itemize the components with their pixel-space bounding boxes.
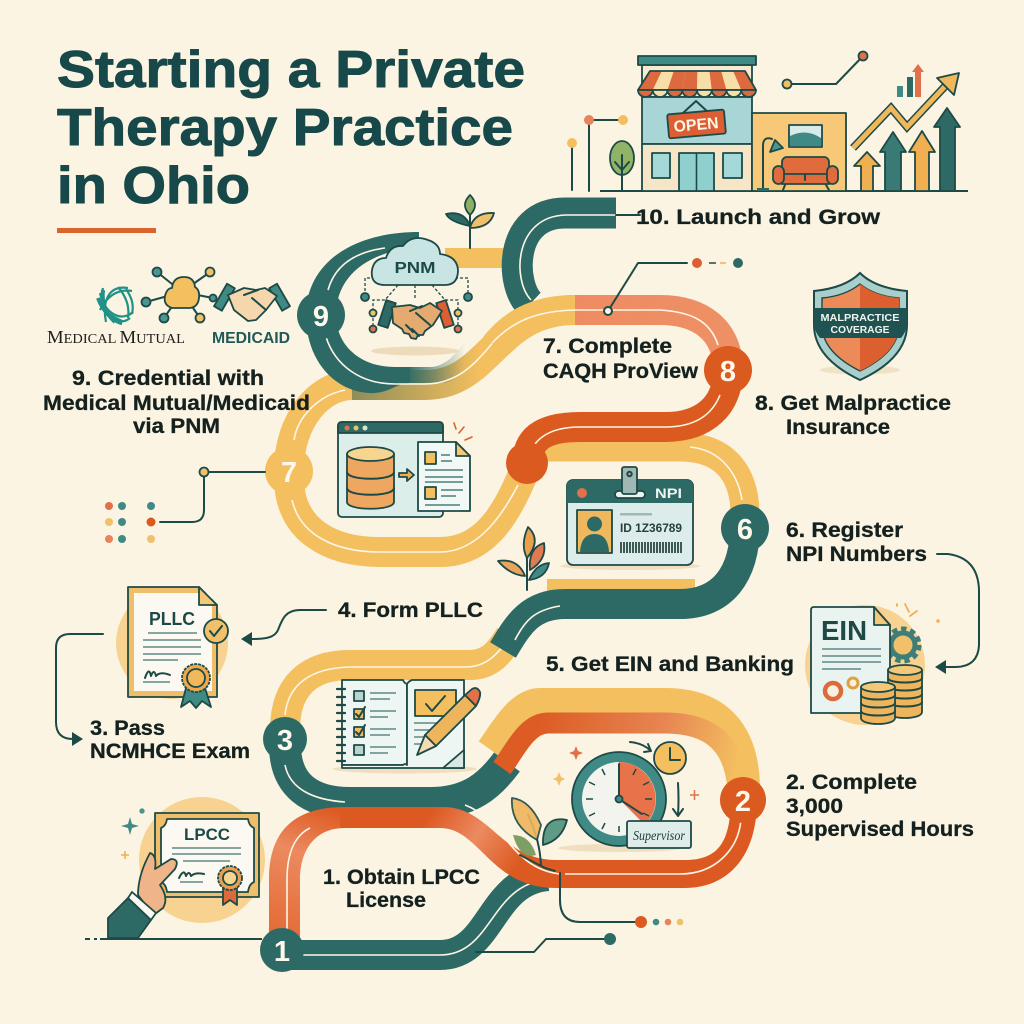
label: 4: 4. Form PLLC	[338, 599, 483, 622]
connector: CAQH leader	[604, 258, 743, 315]
road: segment 5-6 teal	[503, 525, 745, 650]
label: 2: 3,000	[786, 795, 843, 818]
label: 9	[43, 367, 310, 438]
label: 3: 3. Pass	[90, 717, 165, 740]
PLLC text: PLLC	[149, 609, 195, 629]
clock case	[572, 752, 666, 846]
label: 7 complete: CAQH ProView	[543, 360, 699, 383]
label: 7 complete: 7. Complete	[543, 335, 672, 358]
road: segment 3-4 yellow	[285, 636, 510, 730]
label: 10: 10. Launch and Grow	[636, 206, 881, 229]
sparkles	[569, 746, 583, 760]
sparkle	[121, 817, 139, 835]
road: segment 2-3 yellow and orange	[491, 703, 745, 790]
ground line	[600, 190, 968, 192]
icon: PLLC document	[116, 587, 228, 708]
open book	[342, 680, 407, 765]
icon: LPCC certificate	[108, 797, 265, 938]
label: 2	[786, 771, 974, 841]
road: segment 7 yellow lower	[289, 465, 527, 552]
road: segment 10 teal	[517, 213, 616, 304]
step marker 3	[263, 717, 307, 761]
ground shadow	[820, 366, 900, 374]
OPEN sign	[667, 101, 726, 138]
shield text: MALPRACTICE	[820, 312, 900, 324]
gear large	[888, 630, 918, 660]
connector: step 7 leader with dots	[105, 468, 265, 543]
label: 2: Supervised Hours	[786, 818, 974, 841]
sleeve	[108, 898, 151, 938]
dot	[139, 808, 145, 814]
backing circle	[116, 587, 228, 699]
signature	[145, 671, 170, 678]
label: 9: Medical Mutual/Medicaid	[43, 392, 310, 415]
signature	[179, 872, 204, 878]
title	[57, 41, 525, 215]
right lines	[414, 723, 440, 744]
seal	[181, 664, 211, 708]
label: 5: 5. Get EIN and Banking	[546, 653, 794, 676]
NPI text: NPI	[655, 485, 682, 501]
road: segment 1 teal	[282, 876, 548, 955]
card header	[567, 480, 693, 503]
label: 9: 9. Credential with	[72, 367, 264, 390]
label: 1: License	[346, 889, 426, 912]
document	[418, 442, 470, 511]
icon: medical mutual logo	[47, 287, 185, 347]
step marker 7	[265, 447, 313, 495]
hand	[138, 853, 177, 914]
arrow: PLLC to step 3	[56, 634, 103, 746]
title: in Ohio	[57, 157, 250, 215]
floating connector	[782, 52, 868, 88]
backing circle	[139, 797, 265, 923]
text lines	[822, 649, 881, 669]
connector: plant to dots	[560, 873, 683, 928]
transfer arrow	[399, 469, 414, 481]
clock face	[582, 762, 656, 836]
step marker 9	[297, 291, 345, 339]
shield outer	[814, 273, 907, 380]
road: segment 3 teal	[285, 745, 507, 803]
blob on orange segment	[506, 442, 548, 484]
road: segment 9 yellow connector	[445, 248, 505, 268]
icon: checklist notebook	[333, 680, 480, 774]
shop building	[638, 56, 756, 191]
icon: malpractice shield	[814, 273, 907, 380]
mini bar chart	[897, 64, 924, 97]
small clock	[654, 742, 686, 774]
sparkle small	[121, 851, 129, 859]
browser window	[338, 422, 443, 517]
road: segment 5-6 yellow inner strip	[547, 579, 695, 593]
label: 3: NCMHCE Exam	[90, 740, 250, 763]
dot	[936, 619, 940, 623]
check badge	[204, 619, 228, 643]
step marker 1	[260, 928, 304, 972]
road: segment 8 orange	[527, 370, 728, 465]
step marker 2	[720, 777, 766, 823]
label: 3	[90, 717, 250, 763]
id number: ID 1Z36789	[620, 521, 682, 535]
road: patch between top band and teal	[492, 310, 575, 346]
label: 1	[323, 866, 480, 912]
LPCC text: LPCC	[184, 825, 230, 844]
spark ticks	[897, 604, 917, 616]
ground shadow	[558, 844, 682, 852]
step marker 7: 7	[281, 457, 297, 489]
cloud	[372, 238, 458, 285]
step marker 8: 8	[720, 356, 736, 388]
tree	[610, 141, 634, 191]
paper	[811, 607, 890, 713]
road: segment 7-8 salmon	[568, 310, 728, 370]
swoosh mark	[98, 287, 133, 324]
step marker 9: 9	[313, 301, 329, 333]
label: 2: 2. Complete	[786, 771, 917, 794]
page curl	[443, 750, 464, 768]
text lines	[143, 633, 201, 682]
icon: storefront	[567, 52, 968, 191]
EIN text: EIN	[821, 615, 867, 646]
label: 7 complete	[543, 335, 699, 383]
pin connectors	[567, 115, 628, 191]
card body	[567, 480, 693, 565]
check boxes	[354, 691, 396, 755]
shield text	[820, 312, 900, 336]
spiral	[337, 689, 345, 761]
database cylinders	[347, 447, 394, 509]
MEDICAID wordmark: MEDICAID	[212, 330, 290, 347]
label: 8	[755, 392, 951, 439]
title: Therapy Practice	[57, 99, 513, 157]
label: 8: Insurance	[786, 416, 890, 439]
step marker 3: 3	[277, 725, 293, 757]
wordmark: MEDICAL MUTUAL	[47, 327, 185, 347]
road: segment 9 teal	[306, 232, 495, 393]
seal	[218, 866, 242, 905]
winding road path	[269, 213, 757, 955]
frame	[155, 813, 259, 897]
connector: step 1 left line	[85, 938, 262, 940]
label: 1: 1. Obtain LPCC	[323, 866, 480, 889]
step marker 1: 1	[274, 936, 290, 968]
step marker 8	[704, 346, 752, 394]
step marker 6	[721, 504, 769, 552]
clip	[615, 467, 645, 498]
backing circle	[805, 605, 925, 725]
road: segment 1-2 orange	[269, 800, 757, 950]
small gears	[825, 678, 858, 699]
supervisor card	[627, 821, 691, 848]
shield face	[822, 284, 899, 371]
arrow: 4 to PLLC	[241, 610, 326, 646]
connector: 10	[616, 214, 640, 216]
dot grid	[105, 502, 156, 543]
text lines	[172, 848, 241, 882]
document paper	[128, 587, 217, 697]
supervisor card: Supervisor	[633, 829, 685, 844]
cycle arrows	[630, 742, 683, 816]
icon: medicaid handshake	[212, 284, 290, 347]
icon: plant at clock	[512, 798, 567, 871]
label: 6: 6. Register	[786, 519, 903, 542]
icon: network cloud	[142, 268, 216, 322]
network nodes	[361, 293, 472, 332]
striped awning	[638, 71, 756, 97]
coin stack front	[861, 682, 895, 724]
label: 8: 8. Get Malpractice	[755, 392, 951, 415]
icon: database window and document	[338, 422, 472, 517]
barcode	[621, 542, 681, 553]
road: segment 6-8 yellow	[535, 447, 745, 515]
icon: EIN document	[805, 604, 940, 725]
shaded sector	[619, 762, 656, 825]
photo	[577, 510, 612, 553]
step marker 6: 6	[737, 514, 753, 546]
ground shadow	[333, 764, 477, 774]
label: 6: NPI Numbers	[786, 543, 927, 566]
icon: sprout top	[446, 195, 494, 248]
pencil	[417, 688, 480, 755]
coin stack back	[888, 665, 922, 718]
arrow: NPI to EIN	[935, 554, 979, 674]
rising arrows	[854, 108, 960, 191]
icon: PNM cloud with handshake	[361, 238, 472, 356]
title: Starting a Private	[57, 41, 525, 99]
sparkle ticks	[454, 423, 472, 440]
ground shadow	[371, 346, 459, 356]
check panel	[415, 690, 456, 716]
step marker 2: 2	[735, 786, 751, 818]
title accent rule	[57, 228, 156, 233]
connector: road to dot	[476, 933, 616, 952]
handshake	[378, 300, 454, 339]
clock hands	[619, 764, 642, 814]
clock ticks	[586, 766, 652, 832]
lounge annex	[752, 113, 846, 191]
ground shadow	[560, 562, 700, 570]
label: 9: via PNM	[133, 415, 220, 438]
label: 6	[786, 519, 927, 566]
banner	[814, 308, 907, 338]
sparkle small	[690, 790, 699, 800]
icon: NPI badge	[560, 467, 700, 570]
road: segment 7 yellow upper	[289, 310, 575, 470]
paper	[161, 819, 254, 892]
icon: plant near badge	[498, 527, 549, 590]
icon: supervision clock	[553, 742, 699, 852]
sparkle yellow	[553, 772, 565, 786]
PNM text: PNM	[394, 260, 436, 277]
id lines	[620, 513, 652, 516]
shield text: COVERAGE	[830, 324, 890, 336]
network links	[365, 278, 468, 325]
OPEN sign: OPEN	[673, 115, 719, 136]
growth zigzag arrow	[853, 73, 959, 148]
